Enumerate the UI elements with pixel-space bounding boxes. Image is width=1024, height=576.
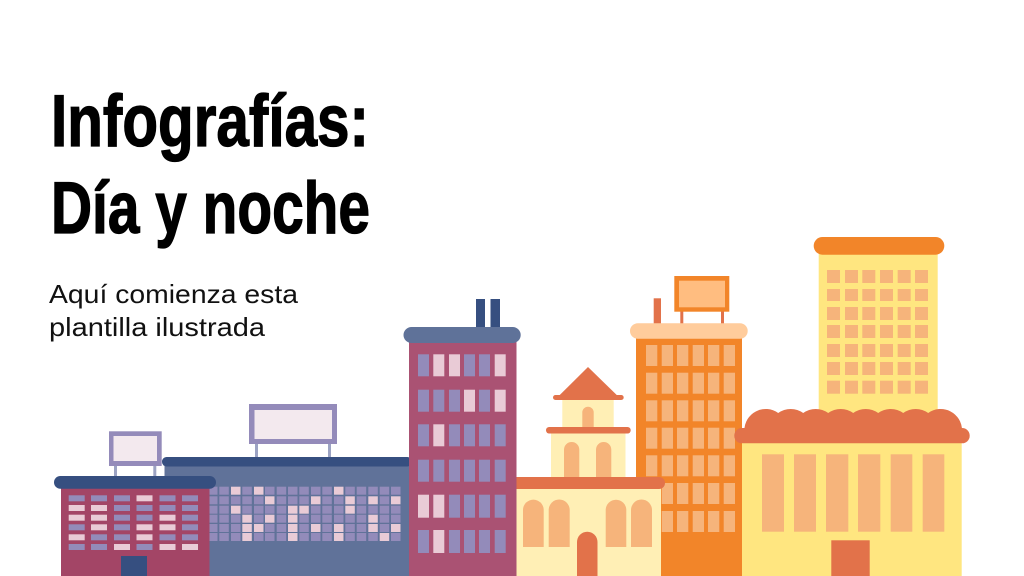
door: red block (121, 556, 147, 576)
door: cream palace (577, 532, 598, 576)
title (51, 81, 370, 249)
windows: yellow tower (827, 270, 928, 394)
building: cream palace (516, 367, 665, 576)
windows: orange tower (646, 345, 735, 532)
building: orange tower (630, 276, 748, 576)
windows: blue block (208, 487, 400, 541)
billboard: orange tower (674, 276, 729, 324)
building: yellow hall (734, 409, 970, 576)
door: yellow hall (831, 540, 870, 576)
subtitle: Aquí comienza esta (49, 279, 299, 309)
tower: cream palace (546, 367, 631, 478)
windows: purple tower (418, 354, 506, 553)
subtitle (49, 279, 299, 342)
billboard: red block (109, 431, 162, 476)
subtitle: plantilla ilustrada (49, 312, 266, 342)
building: red low block (54, 431, 216, 576)
chimneys: purple tower (476, 299, 500, 328)
windows: cream palace (523, 500, 652, 547)
windows: yellow hall (762, 454, 944, 532)
billboard: blue block (249, 404, 337, 457)
building: blue low block (162, 404, 412, 576)
title: Infografías: (51, 81, 369, 162)
windows: red block (69, 495, 198, 550)
title: Día y noche (51, 168, 370, 249)
building: purple tower (404, 299, 521, 576)
scalloped roof: yellow hall (734, 409, 970, 443)
chimney: orange tower (654, 298, 661, 324)
building: yellow tower (814, 237, 944, 420)
